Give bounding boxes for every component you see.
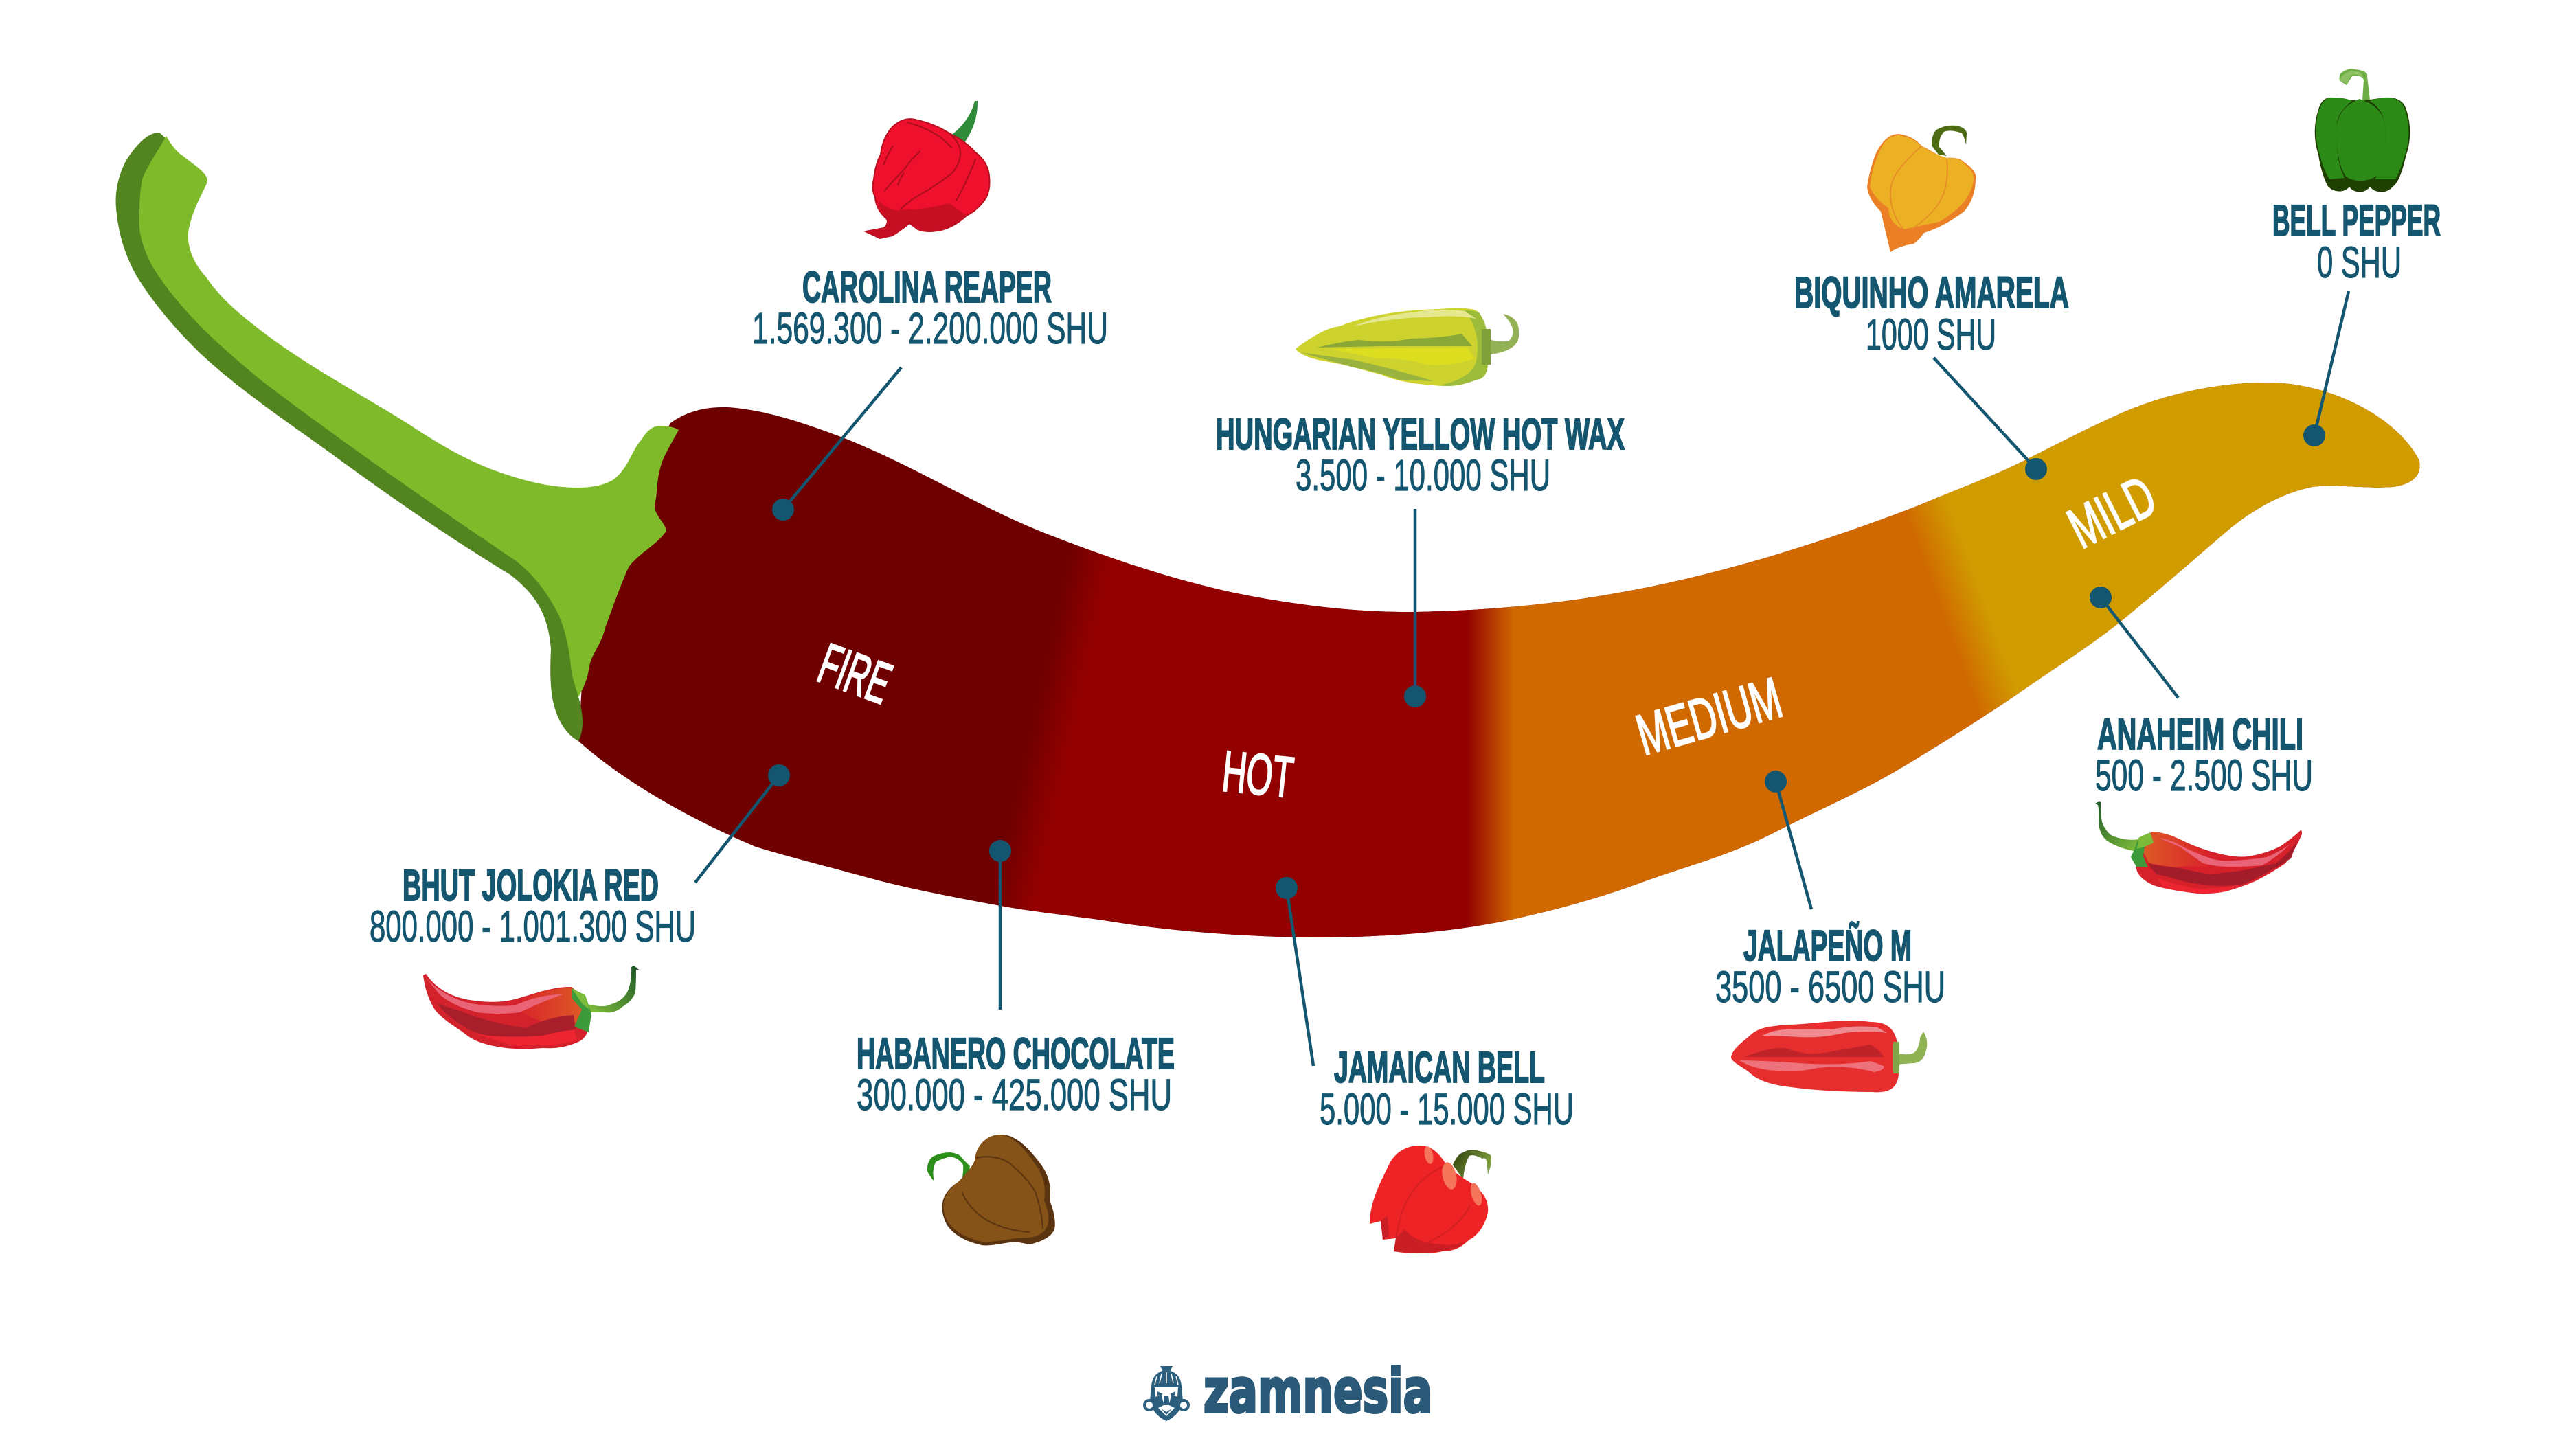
label: Bhut Jolokia Red [370, 861, 696, 951]
callout line: Jamaican Bell [1276, 877, 1313, 1066]
label: Habanero Chocolate: HABANERO CHOCOLATE [857, 1029, 1175, 1078]
label: Anaheim Chili [2095, 709, 2313, 800]
label: Hungarian Yellow Hot Wax [1216, 409, 1625, 500]
icon: Anaheim chili [2095, 801, 2302, 894]
icon: Hungarian yellow hot wax pepper [1296, 308, 1519, 386]
big chili stem [116, 133, 679, 741]
callout line: Jalapeño M [1765, 771, 1811, 909]
label: Bhut Jolokia Red: 800.000 - 1.001.300 SHU [370, 902, 696, 951]
label: Biquinho Amarela: 1000 SHU [1866, 310, 1996, 359]
icon: Carolina Reaper pepper [866, 101, 989, 238]
label: Carolina Reaper [752, 262, 1108, 353]
zone label: HOT: HOT [1219, 738, 1296, 810]
big chili body with heat gradient [578, 383, 2419, 937]
icon: Jalapeño M pepper [1731, 1021, 1927, 1092]
label: Jalapeño M: 3500 - 6500 SHU [1715, 962, 1945, 1012]
logo: Zamnesia [1144, 1356, 1432, 1426]
label: Hungarian Yellow Hot Wax: HUNGARIAN YELLOW HOT WAX [1216, 409, 1625, 459]
label: Anaheim Chili: ANAHEIM CHILI [2097, 709, 2303, 759]
label: Bell Pepper [2272, 196, 2441, 287]
label: Bell Pepper: 0 SHU [2317, 238, 2402, 287]
label: Bell Pepper: BELL PEPPER [2272, 196, 2441, 245]
label: Jamaican Bell: 5.000 - 15.000 SHU [1320, 1084, 1574, 1134]
callout line: Biquinho Amarela [1934, 358, 2047, 480]
icon: Biquinho Amarela pepper [1867, 126, 1976, 252]
label: Jamaican Bell: JAMAICAN BELL [1334, 1043, 1545, 1092]
label: Bhut Jolokia Red: BHUT JOLOKIA RED [403, 861, 659, 910]
label: Carolina Reaper: 1.569.300 - 2.200.000 SHU [752, 304, 1108, 353]
label: Biquinho Amarela [1794, 268, 2069, 359]
label: Jalapeño M [1715, 921, 1945, 1012]
icon: Habanero Chocolate pepper [927, 1135, 1055, 1245]
icon: green bell pepper [2315, 69, 2410, 192]
label: Biquinho Amarela: BIQUINHO AMARELA [1794, 268, 2069, 317]
label: Habanero Chocolate [857, 1029, 1175, 1119]
icon: Bhut Jolokia red chili [423, 966, 639, 1049]
label: Hungarian Yellow Hot Wax: 3.500 - 10.000 SHU [1296, 451, 1550, 500]
label: Jamaican Bell [1320, 1043, 1574, 1134]
callout line: Habanero Chocolate [989, 840, 1011, 1010]
callout line: Bell Pepper [2303, 291, 2349, 446]
callout line: Bhut Jolokia Red [695, 764, 790, 883]
label: Anaheim Chili: 500 - 2.500 SHU [2095, 751, 2313, 800]
callout line: Carolina Reaper [772, 367, 901, 521]
zone label: MILD: MILD [2058, 464, 2166, 560]
icon: Jamaican Bell pepper [1370, 1146, 1491, 1253]
logo wordmark: zamnesia [1204, 1356, 1432, 1426]
logo mask icon [1144, 1366, 1188, 1421]
label: Carolina Reaper: CAROLINA REAPER [802, 262, 1052, 312]
callout line: Hungarian Yellow Hot Wax [1404, 509, 1426, 707]
label: Habanero Chocolate: 300.000 - 425.000 SHU [857, 1070, 1172, 1119]
callout line: Anaheim Chili [2090, 587, 2178, 698]
zone label: FIRE: FIRE [811, 631, 900, 716]
zone label: MEDIUM: MEDIUM [1629, 665, 1789, 767]
label: Jalapeño M: JALAPEÑO M [1743, 921, 1912, 970]
